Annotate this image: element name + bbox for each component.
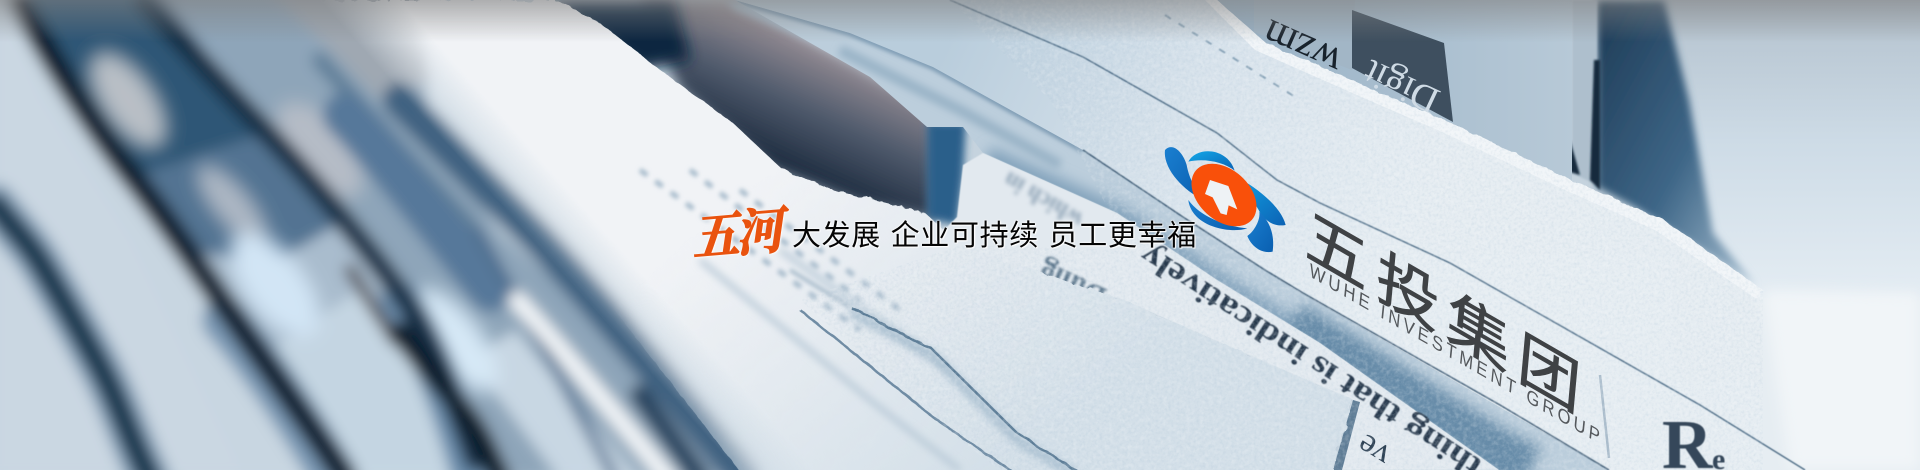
shaded fold below logo band <box>720 0 1620 470</box>
dark printed label: wzm <box>1255 10 1349 85</box>
white bottom-right page <box>1763 290 1920 470</box>
slogan <box>691 190 1197 271</box>
white mottling on paper <box>780 0 1770 470</box>
paper grain texture <box>780 0 1770 470</box>
dark printed label: Digit <box>1357 51 1446 122</box>
top vignette <box>0 0 1920 42</box>
text sheet with upside-down newsprint: Dung <box>1034 254 1111 314</box>
logo icon: Wuhe Investment Group emblem <box>1165 147 1286 252</box>
blurred stripes of newspapers on the left <box>0 0 840 470</box>
dark slit edge <box>1570 60 1600 190</box>
dark gap behind the papers <box>1597 0 1755 285</box>
logo wordmark: Chinese name: 五投集团 <box>1303 201 1592 431</box>
slogan text: 大发展 企业可持续 员工更幸福 <box>792 220 1197 252</box>
band outlines <box>950 0 1805 470</box>
right pale wall <box>1640 0 1920 470</box>
blue strip <box>927 122 966 225</box>
logo band sheet, torn edge <box>1000 0 1763 320</box>
top sheet behind band <box>725 0 960 100</box>
brownish back page <box>640 0 935 220</box>
text sheet with upside-down newsprint <box>927 153 1499 470</box>
brush-script name: 五河 <box>691 190 789 271</box>
dark gap above torn paper <box>545 0 690 70</box>
text sheet with upside-down newsprint: which in <box>999 166 1088 232</box>
newspaper behind the torn edge <box>1217 0 1572 190</box>
foreground torn paper <box>280 0 1353 470</box>
logo band sheet <box>735 0 1920 470</box>
logo wordmark: English name: WUHE INVESTMENT GROUP <box>1309 260 1601 448</box>
pale vertical strip <box>1572 0 1597 185</box>
dark printed label <box>1254 0 1453 122</box>
